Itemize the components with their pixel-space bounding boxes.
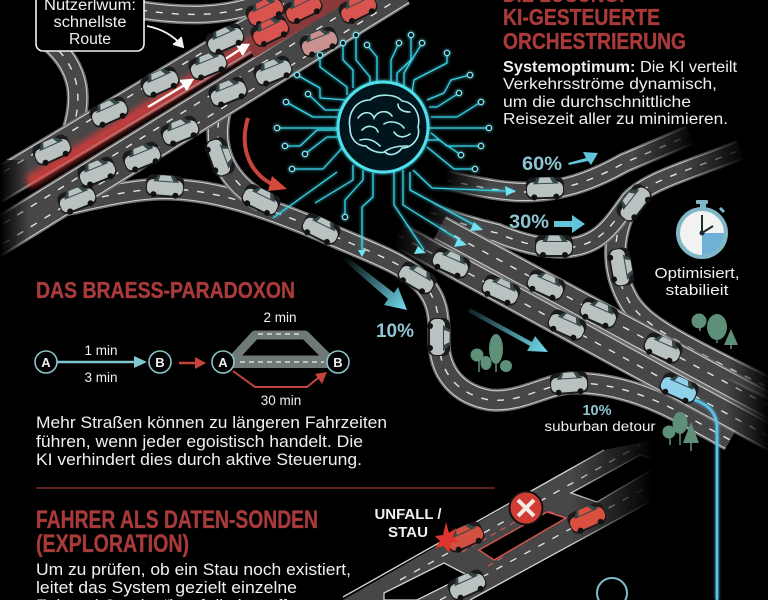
grey car bbox=[445, 567, 489, 600]
trees: lower right bbox=[662, 412, 699, 451]
heading: drivers as data probes: (EXPLORATION) bbox=[36, 530, 189, 558]
left edge road fade bbox=[0, 160, 30, 260]
extended network: B bbox=[333, 355, 343, 370]
text: exploration: leitet das System gezielt einzelne bbox=[36, 578, 297, 597]
extended network: A bbox=[218, 355, 228, 370]
label: suburban detour: 10% bbox=[582, 402, 612, 419]
crashed car bbox=[435, 519, 487, 556]
trees: top right bbox=[692, 314, 738, 349]
icon: magnifier ring bbox=[597, 578, 627, 600]
circuit traces bbox=[273, 32, 505, 250]
text: Braess explanation: KI verhindert dies durch aktive Steuerung. bbox=[36, 450, 362, 469]
label: optimised: Optimisiert, bbox=[654, 265, 740, 282]
text: Braess explanation: Mehr Straßen können zu längeren Fahrzeiten bbox=[36, 413, 387, 432]
text: exploration: Um zu prüfen, ob ein Stau noch existiert, bbox=[36, 560, 351, 579]
heading: solution bbox=[503, 0, 686, 54]
heading: drivers as data probes: FAHRER ALS DATEN-SONDEN bbox=[36, 506, 318, 534]
extended network bbox=[212, 310, 349, 408]
extended network: 2 min bbox=[263, 310, 297, 325]
icon: brain bbox=[349, 95, 419, 155]
red curved arrow bbox=[245, 118, 287, 191]
road: branch to highway bbox=[616, 205, 768, 398]
red cars in jam bbox=[243, 0, 380, 60]
blue highlighted car bbox=[657, 370, 701, 407]
label: accident: STAU bbox=[388, 524, 428, 541]
simple network: B bbox=[155, 355, 165, 370]
text: exploration bbox=[36, 560, 351, 600]
simple network: 1 min bbox=[84, 343, 118, 358]
callout: user route bbox=[36, 0, 144, 51]
label: optimised bbox=[654, 265, 740, 299]
trees: centre bbox=[470, 334, 512, 372]
red congestion lane bbox=[27, 0, 345, 183]
cyan highlighted route bbox=[690, 398, 717, 600]
red probe car bbox=[565, 500, 609, 537]
hub circle bbox=[338, 82, 428, 172]
label: 10 percent: 10% bbox=[376, 321, 414, 342]
extended network: 30 min bbox=[261, 393, 301, 408]
road: main diagonal highways bbox=[398, 228, 768, 448]
AI brain hub bbox=[273, 32, 516, 257]
heading: Braess paradox: DAS BRAESS-PARADOXON bbox=[36, 277, 295, 303]
text: Braess explanation bbox=[36, 413, 387, 469]
white route arrows on congested lane bbox=[148, 45, 248, 107]
diagram: Braess paradox bbox=[35, 310, 349, 408]
big arrow towards 10 percent route bbox=[342, 255, 407, 310]
arrowheads into roads bbox=[358, 186, 516, 257]
simple network: A bbox=[41, 355, 51, 370]
text: system optimum: Verkehrsströme dynamisch, bbox=[503, 76, 717, 93]
label: 30 percent: 30% bbox=[509, 212, 549, 233]
road network: top left junction bbox=[0, 0, 730, 440]
big arrow along highway bbox=[468, 308, 548, 352]
label: suburban detour bbox=[544, 402, 656, 434]
text: system optimum bbox=[503, 59, 738, 128]
road: 30 percent route bbox=[430, 150, 740, 248]
callout: user route: schnellste bbox=[54, 14, 126, 31]
label: 60 percent: 60% bbox=[522, 154, 562, 175]
label: optimised: stabilieit bbox=[666, 282, 729, 299]
cars on right hand roads bbox=[395, 176, 685, 396]
simple network bbox=[35, 343, 171, 385]
text: system optimum: um die durchschnittliche bbox=[503, 94, 691, 111]
heading: solution: KI-GESTEUERTE bbox=[503, 4, 660, 30]
cars on upper highways bbox=[30, 21, 343, 248]
label: suburban detour: suburban detour bbox=[544, 419, 656, 434]
text: system optimum: Reisezeit aller zu minimieren. bbox=[503, 111, 728, 128]
heading: solution: ORCHESTRIERUNG bbox=[503, 28, 686, 54]
heading: drivers as data probes bbox=[36, 506, 318, 558]
red transition arrow bbox=[179, 357, 206, 369]
simple network: 3 min bbox=[84, 370, 118, 385]
circuit nodes bbox=[274, 32, 492, 220]
text: Braess explanation: führen, wenn jeder egoistisch handelt. Die bbox=[36, 432, 363, 451]
callout: user route: Route bbox=[69, 31, 111, 48]
label: accident bbox=[374, 506, 442, 541]
label: 60 percent bbox=[522, 152, 598, 175]
arrow: callout to route bbox=[147, 26, 183, 47]
label: 30 percent bbox=[509, 212, 585, 233]
icon: stopwatch bbox=[678, 200, 726, 257]
road: accident grid bbox=[342, 442, 650, 600]
road: 60 percent route bbox=[445, 135, 690, 192]
label: accident: UNFALL / bbox=[374, 506, 442, 523]
icon: closed road marker bbox=[510, 492, 542, 524]
text: system optimum: Systemoptimum: Die KI verteilt bbox=[503, 59, 738, 76]
